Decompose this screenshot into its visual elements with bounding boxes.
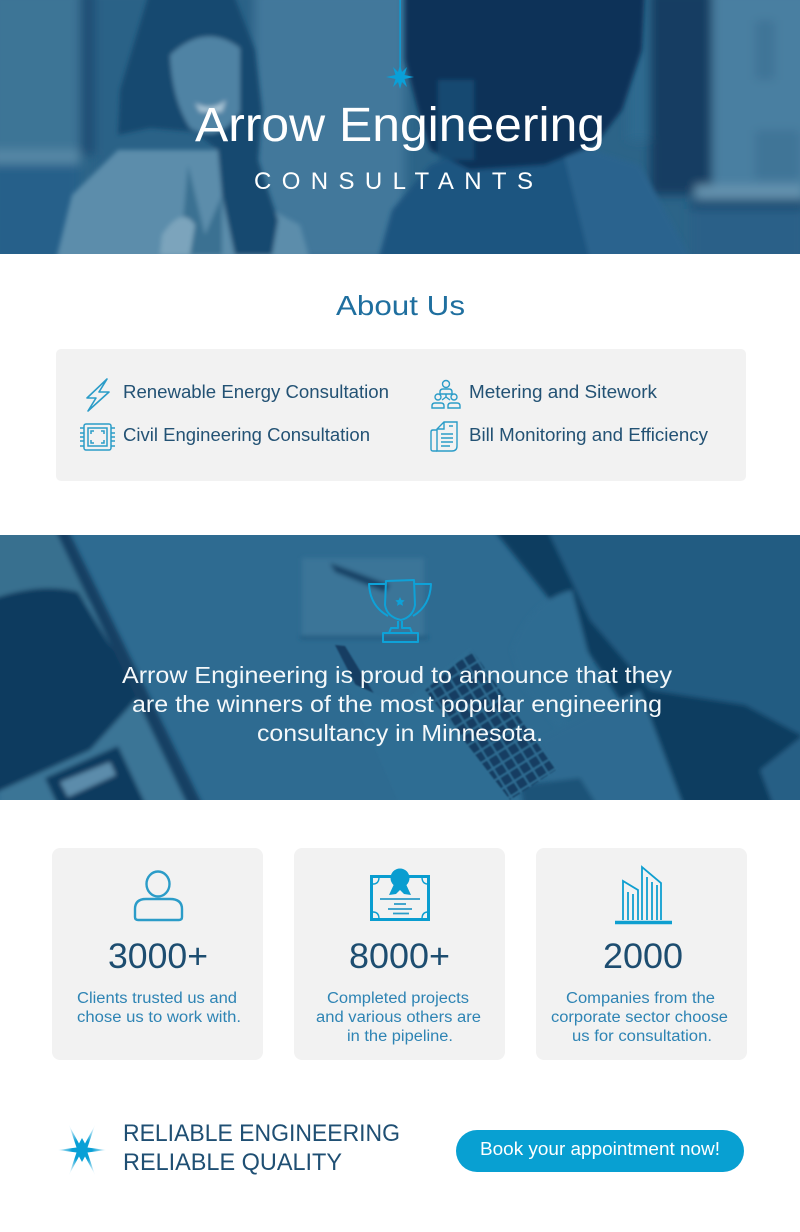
- stat description: and various others are: [316, 1009, 481, 1026]
- hero photo: [0, 0, 800, 269]
- award banner: [0, 525, 800, 810]
- icon: chip: [80, 424, 115, 450]
- award statement: consultancy in Minnesota.: [257, 720, 543, 746]
- stat description: Companies from the: [566, 990, 715, 1007]
- stat card: companies: [536, 848, 747, 1060]
- tagline: RELIABLE QUALITY: [123, 1149, 342, 1176]
- hero banner: [0, 0, 800, 269]
- title: Arrow Engineering: [195, 99, 605, 152]
- stat description: [77, 990, 241, 1026]
- service text: civil engineering: Civil Engineering Consultation: [123, 425, 370, 445]
- stat description: us for consultation.: [572, 1028, 712, 1045]
- tagline: RELIABLE ENGINEERING: [123, 1120, 400, 1147]
- award statement: are the winners of the most popular engineering: [132, 691, 662, 717]
- icon: trophy: [369, 580, 431, 642]
- stat description: Clients trusted us and: [77, 990, 237, 1007]
- service text: metering: Metering and Sitework: [469, 382, 658, 402]
- hanging line and star: [386, 0, 414, 89]
- heading: About Us: About Us: [336, 290, 465, 321]
- call to action button: [456, 1130, 744, 1172]
- stat description: [551, 990, 728, 1045]
- service text: renewable energy: Renewable Energy Consultation: [123, 382, 389, 402]
- subtitle: CONSULTANTS: [254, 168, 533, 195]
- stat description: in the pipeline.: [347, 1028, 453, 1045]
- stat number: 2000: [603, 937, 683, 976]
- footer star: [58, 1125, 106, 1175]
- call to action button: Book your appointment now!: [480, 1139, 720, 1159]
- stat card: clients: [52, 848, 263, 1060]
- stat number: 8000+: [349, 937, 450, 976]
- laptop: [335, 645, 558, 810]
- stat description: [316, 990, 481, 1045]
- icon: people hierarchy: [432, 380, 460, 408]
- award statement: [122, 662, 672, 746]
- stat description: corporate sector choose: [551, 1009, 728, 1026]
- stat description: Completed projects: [327, 990, 469, 1007]
- icon: lightning bolt: [87, 379, 109, 411]
- tagline: [123, 1120, 400, 1176]
- stat description: chose us to work with.: [77, 1009, 241, 1026]
- icon: bill document: [431, 422, 457, 451]
- stat number: 3000+: [108, 937, 208, 976]
- stat card: projects: [294, 848, 505, 1060]
- icon: certificate: [372, 868, 428, 920]
- award statement: Arrow Engineering is proud to announce that they: [122, 662, 672, 688]
- award photo: [0, 525, 800, 810]
- icon: person: [135, 872, 182, 920]
- service text: bill monitoring: Bill Monitoring and Efficiency: [469, 425, 708, 445]
- panel: services: [56, 349, 746, 481]
- icon: buildings: [615, 867, 672, 922]
